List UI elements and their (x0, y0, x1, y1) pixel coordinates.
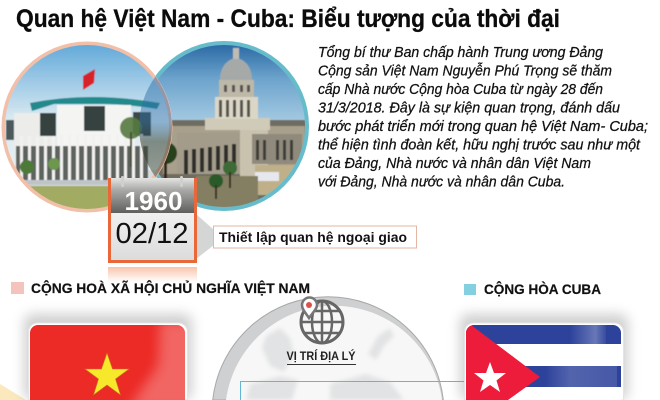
calendar (108, 176, 197, 263)
icon: white star (474, 362, 506, 392)
icon: yellow star (85, 353, 129, 395)
overlap of the two photo circles (139, 76, 172, 177)
flag: Cuba (460, 314, 628, 400)
globe (213, 297, 464, 400)
heading: Cuba: CỘNG HÒA CUBA (484, 280, 601, 297)
body text block: bước phát triển mới trong quan hệ Việt Nam- Cuba; (318, 119, 648, 135)
event label: Thiết lập quan hệ ngoại giao (219, 230, 407, 245)
map frame (240, 382, 464, 400)
body text block: thể hiện tình đoàn kết, hữu nghị trước sau như một (318, 138, 641, 154)
body text block: với Đảng, Nhà nước và nhân dân Cuba. (318, 174, 565, 190)
event label (214, 226, 416, 248)
decorative corner (0, 384, 26, 400)
photo: Vietnam National Assembly in circle (0, 40, 180, 216)
calendar pointer (196, 214, 214, 259)
flag: Vietnam (24, 314, 200, 400)
body text block: Cộng sản Việt Nam Nguyễn Phú Trọng sẽ thăm (318, 62, 612, 80)
icon: globe with pin (301, 298, 343, 343)
body text block (318, 45, 648, 190)
calendar date: 02/12 (116, 218, 188, 250)
body text block: của Đảng, Nhà nước và nhân dân Việt Nam (318, 156, 591, 172)
heading: Vietnam: CỘNG HOÀ XÃ HỘI CHỦ NGHĨA VIỆT NAM (31, 279, 310, 296)
body text block: Tổng bí thư Ban chấp hành Trung ương Đảng (318, 45, 603, 61)
calendar year: 1960 (124, 186, 182, 216)
globe label: VỊ TRÍ ĐỊA LÝ (286, 348, 356, 363)
body text block: cấp Nhà nước Cộng hòa Cuba từ ngày 28 đến (318, 82, 603, 98)
photo: Cuba Capitol in circle (156, 41, 309, 211)
body text block: 31/3/2018. Đây là sự kiện quan trọng, đánh dấu (318, 100, 620, 116)
calendar reflection (108, 267, 197, 282)
title: Quan hệ Việt Nam - Cuba: Biểu tượng của thời đại (16, 5, 560, 33)
